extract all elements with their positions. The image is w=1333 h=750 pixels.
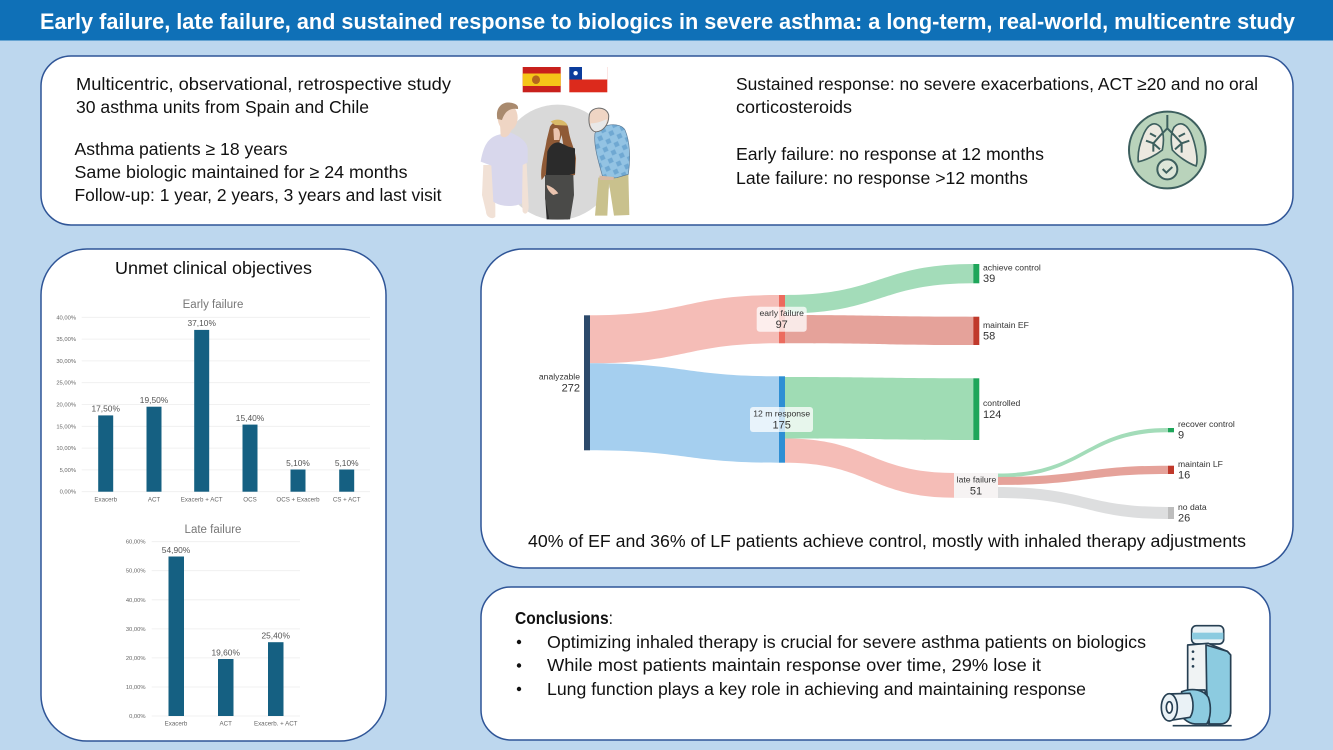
bar chart: late failure: 60,00% — [126, 540, 146, 546]
text block: sustained response definition: Sustained response: no severe exacerbations, ACT ≥20 and no oral — [736, 74, 1258, 94]
panel: unmet clinical objectives — [41, 249, 386, 741]
list: conclusions: Optimizing inhaled therapy is crucial for severe asthma patients on biologics — [547, 632, 1146, 652]
young man — [481, 103, 529, 218]
node: maintain EF — [973, 317, 1029, 345]
node: no data: 26 — [1178, 512, 1190, 524]
bar chart: late failure: 30,00% — [126, 627, 146, 633]
bar chart: early failure: Exacerb — [94, 497, 118, 504]
node: maintain LF: 16 — [1178, 470, 1190, 482]
icon: inhaler — [1161, 626, 1232, 726]
panel: study design and definitions — [41, 56, 1293, 225]
bar chart: early failure: 15,00% — [56, 424, 76, 430]
icon: flag of Chile — [569, 67, 607, 92]
bar chart: early failure: 30,00% — [56, 359, 76, 365]
bar chart: early failure: 25,00% — [56, 381, 76, 387]
bar chart: late failure — [126, 524, 300, 728]
bar chart: late failure: 40,00% — [126, 598, 146, 604]
bar chart: late failure: Exacerb. + ACT — [254, 721, 298, 728]
node: controlled: controlled — [983, 398, 1020, 408]
node: early failure: 97 — [776, 319, 788, 331]
illustration: three patients — [481, 103, 630, 220]
flow: early failure to achieve control — [785, 264, 973, 314]
bar chart: early failure: 15,40% — [236, 413, 265, 423]
node: early failure: early failure — [759, 308, 804, 318]
icon: lungs with check mark — [1129, 112, 1206, 188]
list: conclusions: Lung function plays a key role in achieving and maintaining response — [547, 679, 1086, 699]
bar chart: early failure: 37,10% — [187, 318, 216, 328]
node: no data: no data — [1178, 502, 1207, 512]
bar chart: early failure: OCS + Exacerb — [276, 497, 320, 504]
node: late failure — [954, 473, 998, 498]
bar chart: late failure: ACT — [220, 721, 232, 728]
node: recover control — [1168, 419, 1235, 442]
node: maintain EF: 58 — [983, 330, 995, 342]
node: maintain LF: maintain LF — [1178, 459, 1223, 469]
bar chart: early failure: 19,50% — [140, 395, 169, 405]
node: 12 m response — [750, 376, 813, 463]
text block: sustained response definition: corticosteroids — [736, 97, 852, 117]
text block: inclusion criteria — [74, 139, 442, 205]
node: achieve control — [973, 262, 1041, 285]
node: maintain LF — [1168, 459, 1223, 482]
text block: study type: 30 asthma units from Spain and Chile — [76, 97, 369, 117]
text block: inclusion criteria: Asthma patients ≥ 18 years — [74, 139, 288, 159]
node: maintain EF: maintain EF — [983, 320, 1029, 330]
old man — [589, 108, 630, 216]
bar chart: early failure: 40,00% — [56, 315, 76, 321]
young woman — [541, 120, 576, 219]
text block: failure definitions: Late failure: no response >12 months — [736, 168, 1028, 188]
node: recover control: recover control — [1178, 419, 1235, 429]
icon: flag of Spain — [523, 67, 561, 92]
bar chart: early failure: 5,00% — [60, 468, 76, 474]
bar chart: early failure — [56, 299, 370, 504]
list: conclusions — [517, 632, 1146, 699]
bar chart: late failure: 0,00% — [129, 714, 146, 720]
text block: inclusion criteria: Same biologic maintained for ≥ 24 months — [74, 162, 408, 182]
bar chart: early failure: CS + ACT — [333, 497, 361, 504]
bar chart: late failure: Late failure — [185, 524, 241, 536]
text block: sustained response definition — [736, 74, 1258, 117]
panel: patient flow sankey — [481, 249, 1293, 568]
text block: inclusion criteria: Follow-up: 1 year, 2 years, 3 years and last visit — [74, 185, 442, 205]
node: controlled — [973, 378, 1020, 440]
panel: conclusions — [481, 587, 1270, 740]
node: analyzable: 272 — [562, 383, 580, 395]
node: late failure: 51 — [970, 486, 982, 498]
node: early failure — [757, 295, 807, 343]
bar chart: late failure: 20,00% — [126, 656, 146, 662]
text block: failure definitions — [736, 144, 1044, 188]
heading: unmet clinical objectives: Unmet clinical objectives — [115, 258, 312, 278]
node: achieve control: achieve control — [983, 262, 1041, 272]
bar chart: early failure: 5,10% — [335, 458, 359, 468]
bar chart: late failure: Exacerb — [165, 721, 188, 728]
flow: early failure to maintain EF — [785, 315, 973, 345]
flow: 12 m response to controlled — [785, 377, 973, 440]
bar chart: early failure: 35,00% — [56, 337, 76, 343]
flow: 12 m response to late failure — [785, 438, 955, 498]
bar chart: early failure: 5,10% — [286, 458, 310, 468]
node: 12 m response: 175 — [773, 420, 791, 432]
list: conclusions: While most patients maintain response over time, 29% lose it — [547, 655, 1041, 675]
title banner: Early failure, late failure, and sustained response to biologics in severe asthma: a long-term, real-world, multicentre study — [40, 9, 1296, 34]
title banner — [0, 0, 1333, 40]
bar chart: early failure: 0,00% — [60, 490, 76, 496]
bar chart: early failure: Exacerb + ACT — [181, 497, 223, 504]
sankey diagram — [539, 262, 1235, 524]
node: late failure: late failure — [957, 474, 997, 484]
bar chart: late failure: 54,90% — [162, 545, 191, 555]
bar chart: late failure: 10,00% — [126, 685, 146, 691]
flow: late failure to recover control — [998, 428, 1168, 478]
node: recover control: 9 — [1178, 430, 1184, 442]
bar chart: late failure: 19,60% — [211, 648, 240, 658]
bar chart: late failure: 25,40% — [261, 630, 290, 640]
bar chart: early failure: ACT — [148, 497, 160, 504]
node: analyzable: analyzable — [539, 372, 580, 382]
flow: analyzable to early failure — [590, 295, 779, 363]
node: controlled: 124 — [983, 409, 1001, 421]
bar chart: early failure: 10,00% — [56, 446, 76, 452]
bar chart: early failure: 20,00% — [56, 402, 76, 408]
heading: conclusions: Conclusions: — [515, 608, 613, 628]
text block: study type: Multicentric, observational, retrospective study — [76, 74, 451, 94]
text block: failure definitions: Early failure: no response at 12 months — [736, 144, 1044, 164]
node: achieve control: 39 — [983, 273, 995, 285]
caption: sankey takeaway: 40% of EF and 36% of LF patients achieve control, mostly with inhaled therapy adjustments — [528, 531, 1246, 551]
bar chart: early failure: 17,50% — [91, 404, 120, 414]
bar chart: late failure: 50,00% — [126, 569, 146, 575]
flow: analyzable to 12 m response — [590, 363, 779, 463]
node: no data — [1168, 502, 1207, 524]
flow: late failure to no data — [998, 487, 1168, 519]
text block: study type — [76, 74, 451, 117]
node: 12 m response: 12 m response — [753, 408, 810, 418]
flow: late failure to maintain LF — [998, 466, 1168, 485]
bar chart: early failure: OCS — [243, 497, 257, 504]
node: analyzable — [539, 315, 590, 450]
bar chart: early failure: Early failure — [183, 299, 243, 311]
